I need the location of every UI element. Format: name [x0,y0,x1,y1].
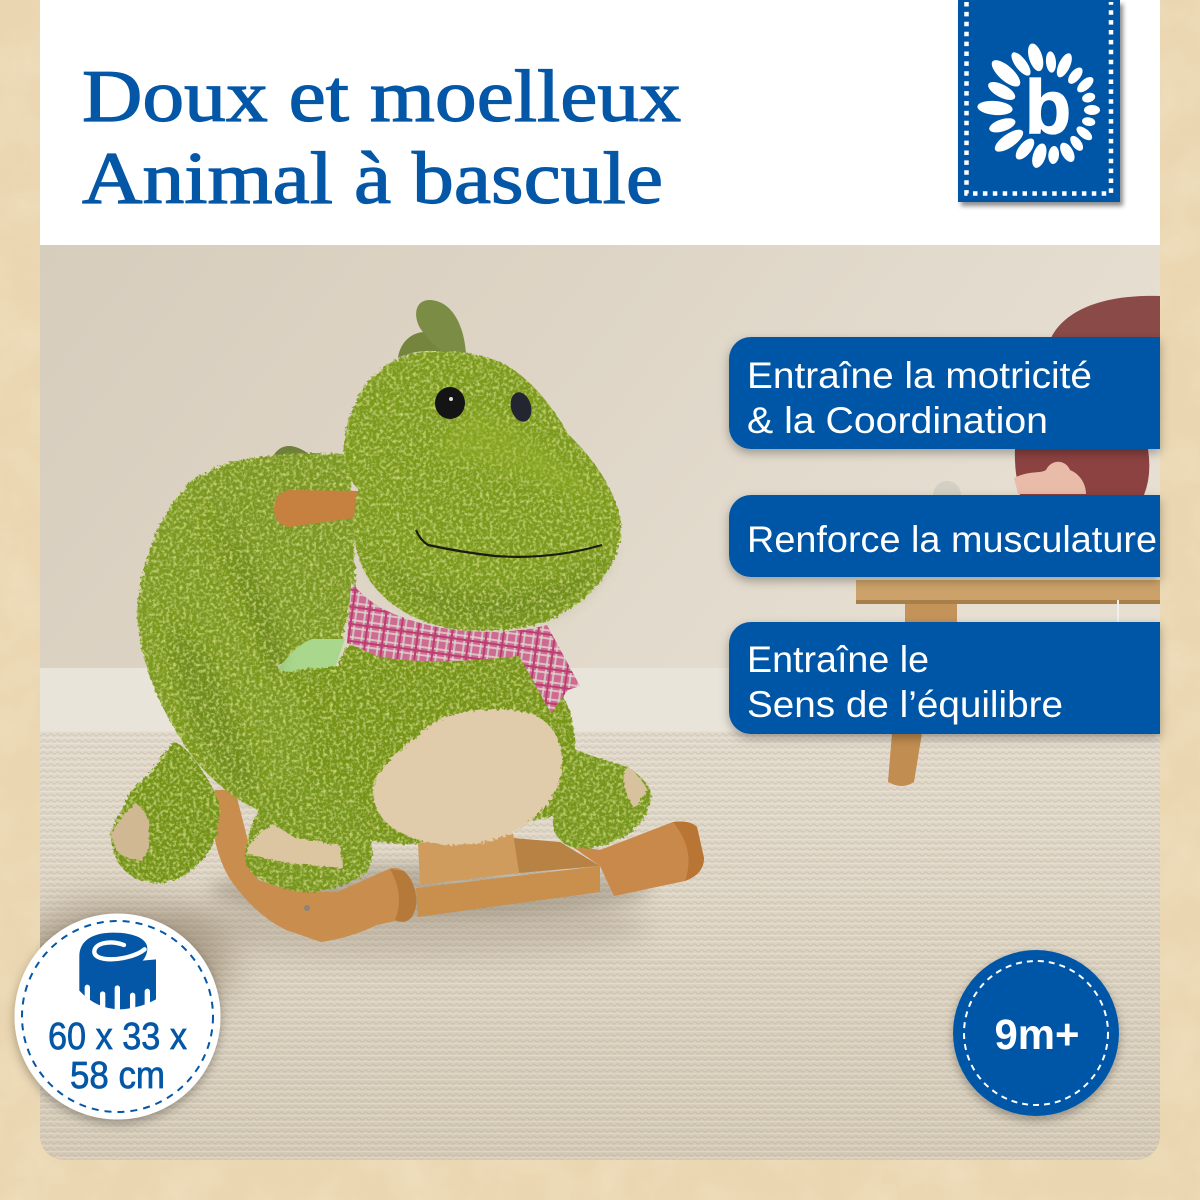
armrest inner edge shading [224,520,290,671]
green fur body [111,351,652,892]
belly and foot pads [111,709,648,869]
benefit: équilibre: Sens de l’équilibre [747,684,1063,725]
eyes [435,387,535,424]
head [344,351,621,631]
logo tag [958,0,1120,202]
head shading [365,540,612,625]
badge: age 9m+ [953,950,1119,1116]
strap [275,639,345,673]
wall [40,245,1160,670]
title: Animal à bascule [82,138,663,220]
head crest [398,300,466,358]
benefit: équilibre [729,622,1160,734]
benefit: motricité: & la Coordination [747,400,1048,441]
header panel [40,0,1160,245]
armrest [138,487,309,810]
right foot [553,749,652,848]
scarf [347,582,580,713]
plush dinosaur rocker [111,300,704,942]
seat back [185,453,356,665]
benefit: musculature [729,495,1160,577]
furniture: cushion, toy and table [856,296,1160,786]
rocker base [213,790,704,942]
shadow [210,864,650,916]
dimensions text [48,1016,187,1097]
dimensions text: 58 cm [70,1055,165,1097]
stitching [966,2,1111,194]
baseboard [40,668,740,731]
badge: age 9m+: 9m+ [994,1011,1080,1059]
face highlight [436,412,588,500]
front foot [245,778,373,892]
carpet [10,731,1160,1160]
mouth [416,530,602,557]
benefit: musculature: Renforce la musculature [747,519,1157,560]
badge: dimensions [14,914,220,1120]
back crest [274,446,310,456]
dimensions text: 60 x 33 x [48,1016,187,1058]
logo sunburst [977,42,1100,170]
title: Doux et moelleux [82,56,681,138]
photo: room scene with plush dinosaur [10,245,1160,1160]
rear foot [111,742,220,883]
benefit: équilibre: Entraîne le [747,639,929,680]
benefit: motricité: Entraîne la motricité [747,355,1092,396]
handle [274,490,360,527]
logo letter: b [1025,65,1071,150]
icon: measuring tape roll [79,933,156,1011]
armrest shading [174,635,256,805]
title [82,56,681,220]
torso [258,643,575,845]
benefit: motricité [729,337,1160,449]
